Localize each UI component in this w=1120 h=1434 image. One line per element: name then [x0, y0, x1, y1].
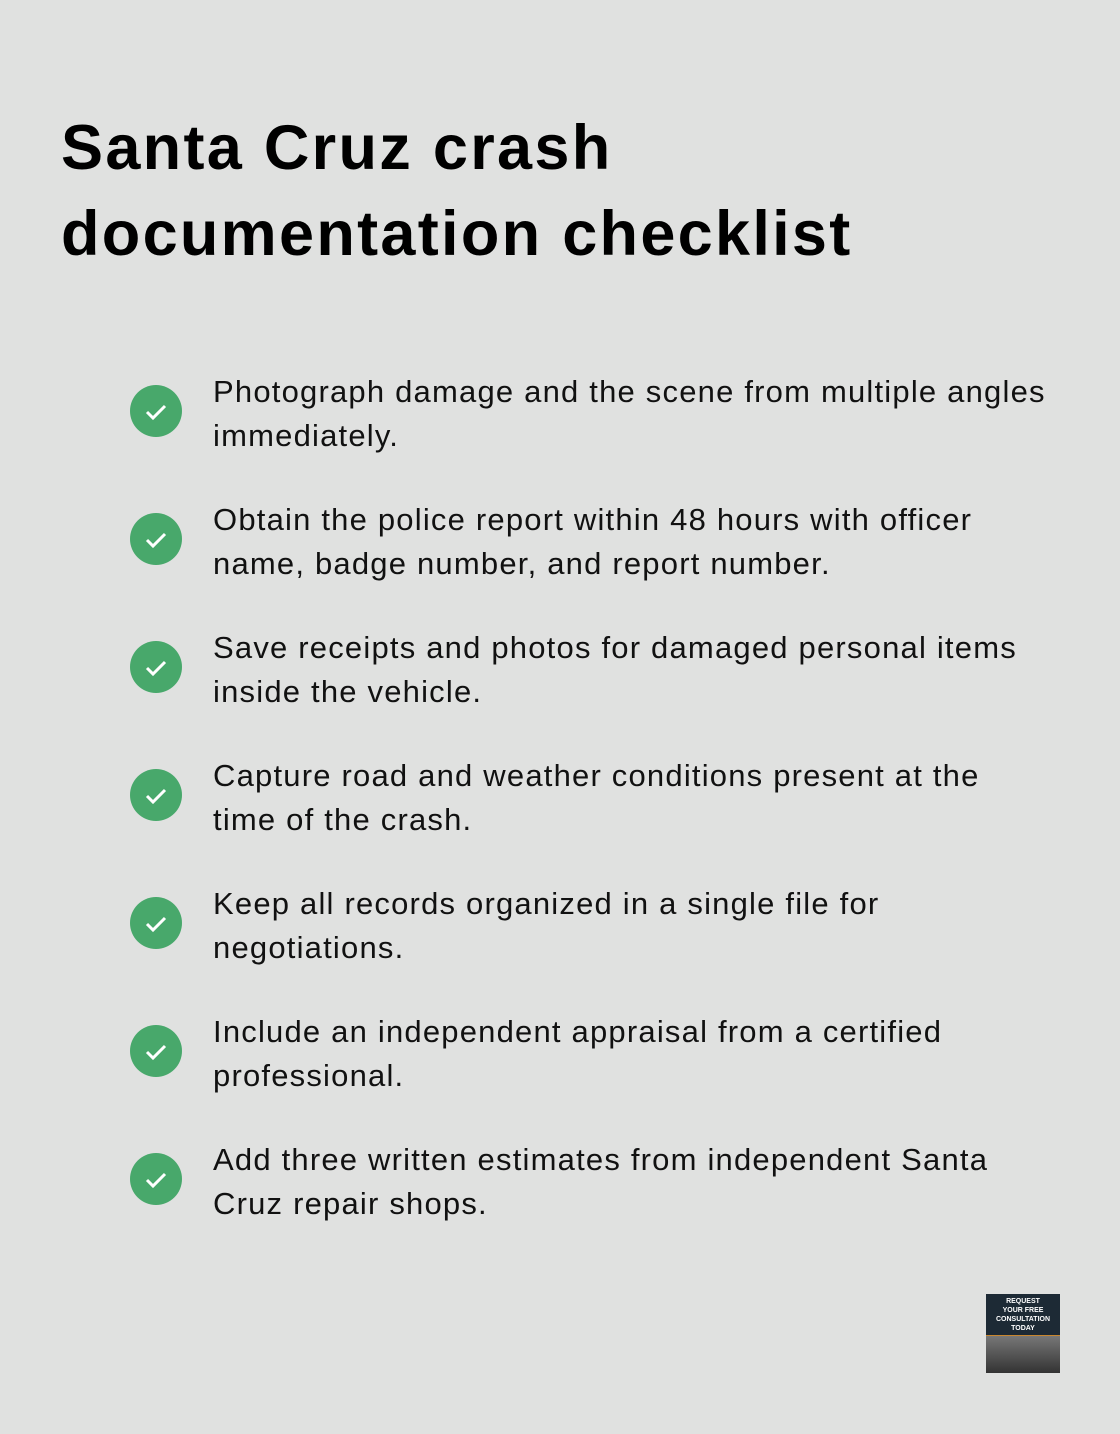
text: Capture road and weather conditions present at the [213, 758, 980, 793]
icon: check [130, 1025, 182, 1077]
text: Photograph damage and the scene from multiple angles [213, 374, 1046, 409]
logo: consultation badge: REQUEST [1006, 1298, 1040, 1305]
title [61, 113, 853, 269]
logo: consultation badge: YOUR FREE [1003, 1307, 1043, 1314]
icon: check [130, 641, 182, 693]
title: Santa Cruz crash [61, 113, 612, 183]
icon: check [130, 513, 182, 565]
text: Keep all records organized in a single file for [213, 886, 879, 921]
text: professional. [213, 1058, 404, 1093]
text: Cruz repair shops. [213, 1186, 488, 1221]
text: Include an independent appraisal from a certified [213, 1014, 942, 1049]
item 3 [130, 630, 1017, 709]
logo: consultation badge: TODAY [1011, 1325, 1035, 1332]
title: documentation checklist [61, 199, 853, 269]
logo: consultation badge: CONSULTATION [996, 1316, 1050, 1323]
item 4 [130, 758, 980, 837]
text [213, 886, 879, 965]
text [213, 1142, 988, 1221]
text: Save receipts and photos for damaged personal items [213, 630, 1017, 665]
logo: consultation badge [986, 1294, 1060, 1373]
icon: check [130, 385, 182, 437]
text: time of the crash. [213, 802, 472, 837]
item 5 [130, 886, 879, 965]
item 6 [130, 1014, 942, 1093]
text: negotiations. [213, 930, 404, 965]
icon: check [130, 897, 182, 949]
text: inside the vehicle. [213, 674, 482, 709]
text: name, badge number, and report number. [213, 546, 831, 581]
text: Obtain the police report within 48 hours with officer [213, 502, 972, 537]
text [213, 630, 1017, 709]
text [213, 502, 972, 581]
item 1 [130, 374, 1046, 453]
item 2 [130, 502, 972, 581]
text [213, 374, 1046, 453]
item 7 [130, 1142, 988, 1221]
text [213, 758, 980, 837]
text [213, 1014, 942, 1093]
icon: check [130, 769, 182, 821]
icon: check [130, 1153, 182, 1205]
text: immediately. [213, 418, 399, 453]
text: Add three written estimates from independent Santa [213, 1142, 988, 1177]
